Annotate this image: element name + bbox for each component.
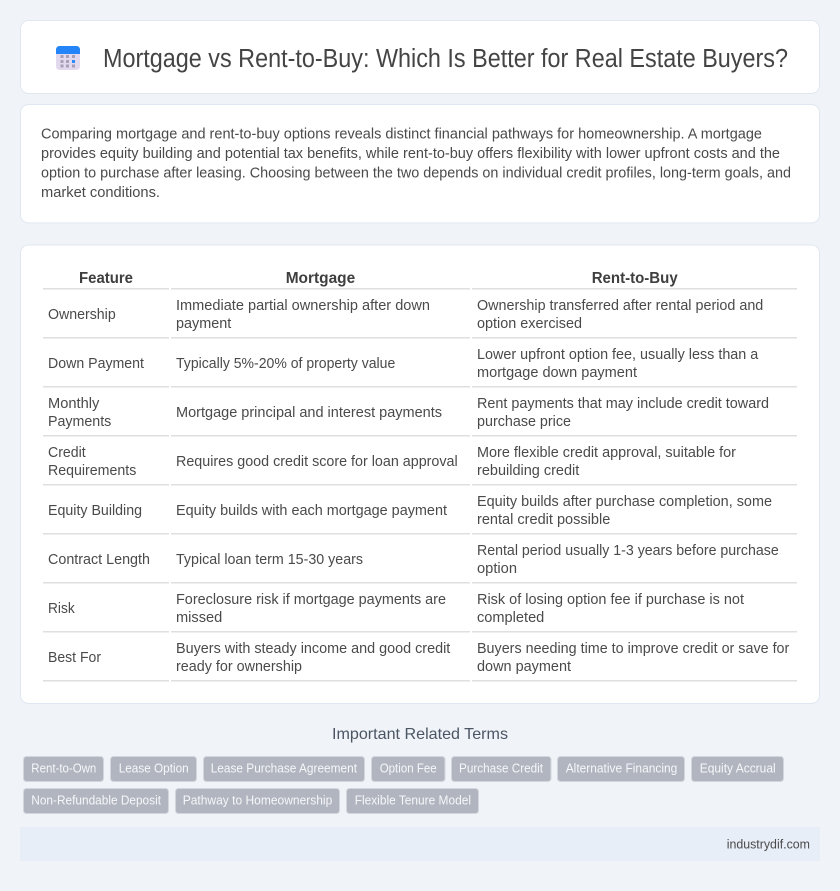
row: best for: Best For [48, 650, 101, 666]
row: monthly payments: Payments [48, 414, 111, 430]
row: credit requirements [48, 445, 736, 479]
text block: summary paragraph: Comparing mortgage and rent-to-buy options reveals distinct financial pathways for homeownership. A mortgage [41, 126, 762, 142]
row: contract length: Typical loan term 15-30 years [176, 552, 363, 568]
row: best for [48, 641, 789, 675]
row: down payment: Typically 5%-20% of property value [176, 356, 395, 372]
text block: summary paragraph: provides equity building and potential tax benefits, while rent-to-buy offers flexibility with lower upfront costs and the [41, 146, 780, 162]
row: contract length: option [477, 561, 517, 577]
panel: header [20, 20, 820, 94]
tag group: related terms: Pathway to Homeownership [183, 793, 332, 808]
tag group: related terms: Rent-to-Own [31, 761, 96, 776]
row: down payment: Down Payment [48, 356, 144, 372]
panel: introduction text [20, 104, 820, 223]
table header row: Mortgage [286, 270, 355, 287]
tag group: related terms: Lease Option [119, 761, 189, 776]
row: credit requirements: Requires good credit score for loan approval [176, 454, 458, 470]
row: equity building: Equity builds with each mortgage payment [176, 503, 447, 519]
row: ownership: option exercised [477, 316, 582, 332]
row: monthly payments [48, 396, 769, 430]
tag group: related terms: Flexible Tenure Model [355, 793, 471, 808]
tag group: related terms: Lease Purchase Agreement [211, 761, 357, 776]
row: ownership [48, 298, 763, 332]
row: risk: Risk [48, 601, 75, 617]
row: equity building [48, 494, 772, 528]
row: ownership: Ownership [48, 307, 116, 323]
row: equity building: rental credit possible [477, 512, 610, 528]
row: best for: down payment [477, 659, 571, 675]
row: monthly payments: Mortgage principal and interest payments [176, 405, 442, 421]
icon: calendar [56, 46, 80, 70]
tag group: related terms: Equity Accrual [700, 761, 776, 776]
row: ownership: Ownership transferred after rental period and [477, 298, 763, 314]
row: equity building: Equity builds after purchase completion, some [477, 494, 772, 510]
row: credit requirements: More flexible credit approval, suitable for [477, 445, 736, 461]
tag group: related terms: Alternative Financing [566, 761, 677, 776]
text block: summary paragraph: market conditions. [41, 185, 160, 201]
row: risk: missed [176, 610, 222, 626]
row: monthly payments: purchase price [477, 414, 571, 430]
panel: comparison table [20, 245, 820, 704]
text block: summary paragraph: option to purchase after leasing. Choosing between the two depends on individual credit profiles, long-term goals, and [41, 166, 791, 182]
text block: summary paragraph [41, 126, 791, 201]
table header row: Rent-to-Buy [592, 270, 678, 287]
table header row: Feature [79, 270, 133, 287]
footer [20, 827, 820, 861]
row: ownership: payment [176, 316, 231, 332]
row: risk: Risk of losing option fee if purchase is not [477, 592, 744, 608]
row: risk: Foreclosure risk if mortgage payments are [176, 592, 446, 608]
row: monthly payments: Rent payments that may include credit toward [477, 396, 769, 412]
row: credit requirements: rebuilding credit [477, 463, 579, 479]
row: best for: Buyers with steady income and good credit [176, 641, 450, 657]
row: contract length: Rental period usually 1-3 years before purchase [477, 543, 779, 559]
row: contract length [48, 543, 779, 577]
heading: important related terms: Important Related Terms [332, 726, 508, 743]
row: best for: ready for ownership [176, 659, 302, 675]
tag group: related terms [24, 756, 784, 814]
title: Mortgage vs Rent-to-Buy: Which Is Better for Real Estate Buyers? [103, 45, 788, 73]
table header row [79, 270, 678, 287]
row: down payment: Lower upfront option fee, usually less than a [477, 347, 759, 363]
row: risk [48, 592, 744, 626]
row: credit requirements: Credit [48, 445, 86, 461]
row: down payment [48, 347, 759, 381]
row: credit requirements: Requirements [48, 463, 136, 479]
tag group: related terms: Non-Refundable Deposit [31, 793, 161, 808]
row: equity building: Equity Building [48, 503, 142, 519]
tag group: related terms: Purchase Credit [459, 761, 543, 776]
row: down payment: mortgage down payment [477, 365, 637, 381]
tag group: related terms: Option Fee [380, 761, 437, 776]
row: risk: completed [477, 610, 544, 626]
row: ownership: Immediate partial ownership after down [176, 298, 430, 314]
footer: industrydif.com [727, 836, 810, 851]
row: monthly payments: Monthly [48, 396, 100, 412]
row: contract length: Contract Length [48, 552, 150, 568]
row: best for: Buyers needing time to improve credit or save for [477, 641, 789, 657]
